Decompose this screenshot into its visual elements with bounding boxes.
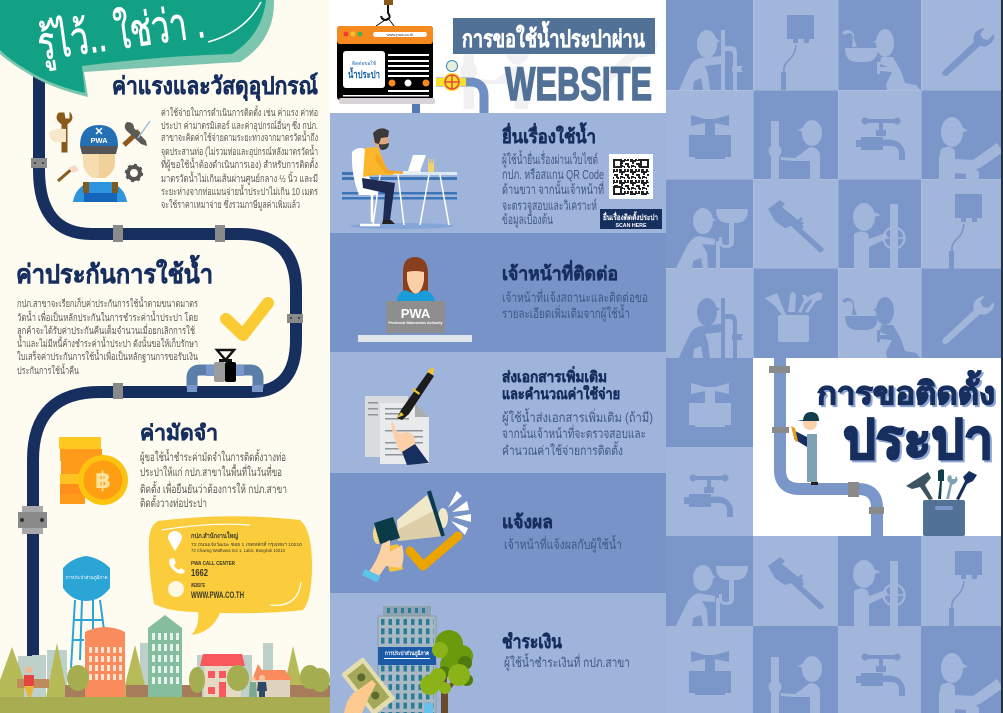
illustration: man at laptop xyxy=(342,128,457,229)
scan here label: ยื่นเรื่องติดตั้งประปา xyxy=(603,211,658,222)
text block: send documents: จากนั้นเจ้าหน้าที่จะตรวจสอบและ xyxy=(502,424,646,441)
contact text xyxy=(191,531,303,600)
text block: water guarantee xyxy=(17,296,198,377)
panel: notify result xyxy=(330,473,666,593)
text block: submit request: ผู้ใช้น้ำยื่นเรื่องผ่านเว็บไซต์ xyxy=(502,150,598,168)
heading: send documents xyxy=(502,366,620,403)
text block: officer contact: เจ้าหน้าที่แจ้งสถานะและติดต่อขอ xyxy=(502,289,648,305)
icon: browser window: ติดต่อขอใช้ xyxy=(352,60,377,67)
title: water supply: ประปา xyxy=(843,410,993,470)
panel: payment xyxy=(330,593,666,713)
illustration: city scene: การประปาส่วนภูมิภาค xyxy=(66,574,108,581)
illustration: documents and pen xyxy=(365,367,434,465)
text block: labour and materials: จุดประสานท่อ (ไม่รวมท่อและอุปกรณ์หลังมาตรวัดน้ำ xyxy=(161,144,318,158)
illustration: megaphone xyxy=(362,491,471,582)
illustration: hand holding money xyxy=(341,657,396,713)
icon: gold coins: ฿ xyxy=(95,467,111,493)
contact text: WWW.PWA.CO.TH xyxy=(191,590,244,600)
panel: website header xyxy=(330,0,666,113)
icon: location pin xyxy=(168,531,182,551)
text block: water guarantee: วัดน้ำ เพื่อเป็นหลักประกันในการชำระค่าน้ำประปา โดย xyxy=(17,310,198,324)
water pipe and yellow valve xyxy=(412,60,484,113)
illustration: PWA officer at desk xyxy=(358,257,472,342)
panel: plumber icon tiles xyxy=(666,0,1003,713)
title: WEBSITE: WEBSITE xyxy=(505,57,652,110)
illustration: PWA officer at desk: Provincial Waterworks Authority xyxy=(388,321,443,325)
faint background silhouettes xyxy=(460,30,530,109)
text block: labour and materials: ประปา ค่ามาตรมิเตอร์ และค่าอุปกรณ์อื่นๆ ซึ่ง กปภ. xyxy=(161,118,318,132)
icon: PWA technician with tools: PWA xyxy=(90,136,108,145)
heading: labour and materials: ค่าแรงและวัสดุอุปกรณ์ xyxy=(112,72,318,102)
heading: deposit: ค่ามัดจำ xyxy=(140,422,218,445)
title banner xyxy=(453,18,655,54)
dark page edge xyxy=(1001,0,1003,713)
illustration: PWA office building: การประปาส่วนภูมิภาค xyxy=(385,649,429,658)
panel: officer contact xyxy=(330,233,666,352)
title: installation: การขอติดตั้ง xyxy=(819,372,997,413)
scan here label xyxy=(600,209,662,229)
text block: submit request xyxy=(502,150,604,228)
title: installation: การขอติดตั้ง xyxy=(817,370,995,411)
text block: submit request: ด้านขวา จากนั้นเจ้าหน้าที่ xyxy=(502,180,604,197)
illustration: plumber xyxy=(791,412,819,485)
heading: send documents: ส่งเอกสารเพิ่มเติม xyxy=(502,366,607,386)
text block: send documents xyxy=(502,408,653,458)
icon: browser window: www.pwa.co.th xyxy=(387,32,413,37)
text block: deposit xyxy=(140,449,287,510)
text block: labour and materials: สาขาจะคิดค่าใช้จ่ายตามระยะทางจากมาตรวัดน้ำถึง xyxy=(161,130,318,144)
text block: water guarantee: ประกันการใช้น้ำคืน xyxy=(17,363,79,377)
illustration: PWA officer at desk: PWA xyxy=(401,306,431,321)
icons on light tiles xyxy=(679,15,994,696)
text block: labour and materials: จะใช้ราคาเหมาจ่าย ซึ่งรวมภาษีมูลค่าเพิ่มแล้ว xyxy=(161,197,300,211)
contact text: 1662 xyxy=(191,568,208,579)
text block: water guarantee: ใบเสร็จค่าประกันการใช้น้ำเพื่อเป็นหลักฐานการขอรับเงิน xyxy=(17,349,198,363)
scan here label: SCAN HERE xyxy=(616,223,647,229)
text block: deposit: ติดตั้งวางท่อประปา xyxy=(140,495,207,510)
heading: water guarantee: ค่าประกันการใช้น้ำ xyxy=(16,254,213,289)
text block: water guarantee: น้ำและไม่มีหนี้ค้างชำระค่าน้ำประปา ดังนั้นขอให้เก็บรักษา xyxy=(17,336,198,350)
text block: submit request: จะตรวจสอบและวิเคราะห์ xyxy=(502,198,597,213)
contact text: PWA CALL CENTER xyxy=(191,561,235,567)
text block: payment: ผู้ใช้น้ำชำระเงินที่ กปภ.สาขา xyxy=(504,653,630,671)
green speech banner xyxy=(0,0,274,97)
icon: crane hook xyxy=(376,0,394,26)
icon: globe xyxy=(168,581,184,597)
text block: water guarantee: กปภ.สาขาจะเรียกเก็บค่าประกันการใช้น้ำตามขนาดมาตร xyxy=(17,296,198,310)
icon: browser window: น้ำประปา xyxy=(348,67,380,81)
icon: PWA technician with tools xyxy=(49,113,150,202)
text block: send documents: ผู้ใช้น้ำส่งเอกสารเพิ่มเติม (ถ้ามี) xyxy=(502,408,653,426)
panel: installation cover xyxy=(753,358,1001,536)
text block: deposit: ประปาให้แก่ กปภ.สาขาในพื้นที่ในวันที่ขอ xyxy=(140,464,282,479)
panel: submit request xyxy=(330,113,666,233)
heading: submit request: ยื่นเรื่องใช้น้ำ xyxy=(502,122,596,148)
text block: submit request: ข้อมูลเบื้องต้น xyxy=(502,210,553,228)
callout: contact details xyxy=(149,516,312,635)
text block: labour and materials xyxy=(161,105,318,211)
text block: deposit: ติดตั้ง เพื่อยืนยันว่าต้องการให้ กปภ.สาขา xyxy=(140,481,287,496)
contact text: 72 ถนนแจ้งวัฒนะ ซอย 1 เขตหลักสี่ กรุงเทพฯ 10210 xyxy=(191,541,303,548)
illustration: city scene xyxy=(0,556,330,713)
icon: pipe valve xyxy=(187,350,263,392)
icon: phone xyxy=(169,558,185,574)
icons on dark tiles xyxy=(676,29,1003,713)
contact text: WEBSITE xyxy=(191,583,205,589)
text block: labour and materials: มาตรวัดน้ำไม่เกินเส้นผ่านศูนย์กลาง ½ นิ้ว และมี xyxy=(161,171,318,185)
text block: send documents: คำนวณค่าใช้จ่ายการติดตั้ง xyxy=(502,441,623,458)
heading: payment: ชำระเงิน xyxy=(502,632,562,653)
illustration: tree xyxy=(420,630,473,713)
heading: officer contact: เจ้าหน้าที่ติดต่อ xyxy=(502,260,618,285)
text block: labour and materials: ระยะห่างจากท่อแมนจ่ายน้ำประปาไม่เกิน 10 เมตร xyxy=(161,184,318,198)
title: water supply: ประปา xyxy=(845,412,995,472)
icon: couple walking xyxy=(249,675,267,697)
panel: send documents xyxy=(330,352,666,473)
QR code xyxy=(609,154,653,199)
text block: deposit: ผู้ขอใช้น้ำชำระค่ามัดจำในการติดตั้งวางท่อ xyxy=(140,449,286,464)
contact text: 72 Chaeng Watthana Soi 1, Laksi, Bangkok 10210 xyxy=(191,548,285,553)
heading: notify result: แจ้งผล xyxy=(502,512,553,532)
icon: toolbox xyxy=(906,469,977,536)
text block: submit request: กปภ. หรือสแกน QR Code xyxy=(502,167,604,182)
illustration: PWA office building xyxy=(378,606,436,713)
heading: send documents: และคำนวณค่าใช้จ่าย xyxy=(502,385,620,403)
text block: notify result: เจ้าหน้าที่แจ้งผลกับผู้ใช้น้ำ xyxy=(504,535,622,553)
text block: labour and materials: ค่าใช้จ่ายในการดำเนินการติดตั้ง เช่น ค่าแรง ค่าท่อ xyxy=(161,105,318,119)
text block: labour and materials: ที่ผู้ขอใช้น้ำต้องดำเนินการเอง) สำหรับการติดตั้ง xyxy=(161,157,318,171)
text block: officer contact: รายละเอียดเพิ่มเติมจากผู้ใช้น้ำ xyxy=(502,304,630,322)
icon: yellow check mark xyxy=(226,303,268,335)
icon: gold coins xyxy=(59,437,128,505)
text block: water guarantee: ลูกค้าจะได้รับค่าประกันคืนเต็มจำนวนเมื่อยกเลิกการใช้ xyxy=(17,323,195,337)
blue water pipe route xyxy=(33,60,296,665)
title banner: การขอใช้น้ำประปาผ่าน xyxy=(462,20,645,53)
pipe clamps xyxy=(18,158,303,534)
text block: officer contact xyxy=(502,289,648,322)
cover pipe xyxy=(780,358,877,536)
panel: cost information xyxy=(0,0,330,713)
icon: browser window xyxy=(337,26,435,104)
contact text: กปภ.สำนักงานใหญ่ xyxy=(191,531,238,540)
icon: man on bench xyxy=(17,666,49,697)
